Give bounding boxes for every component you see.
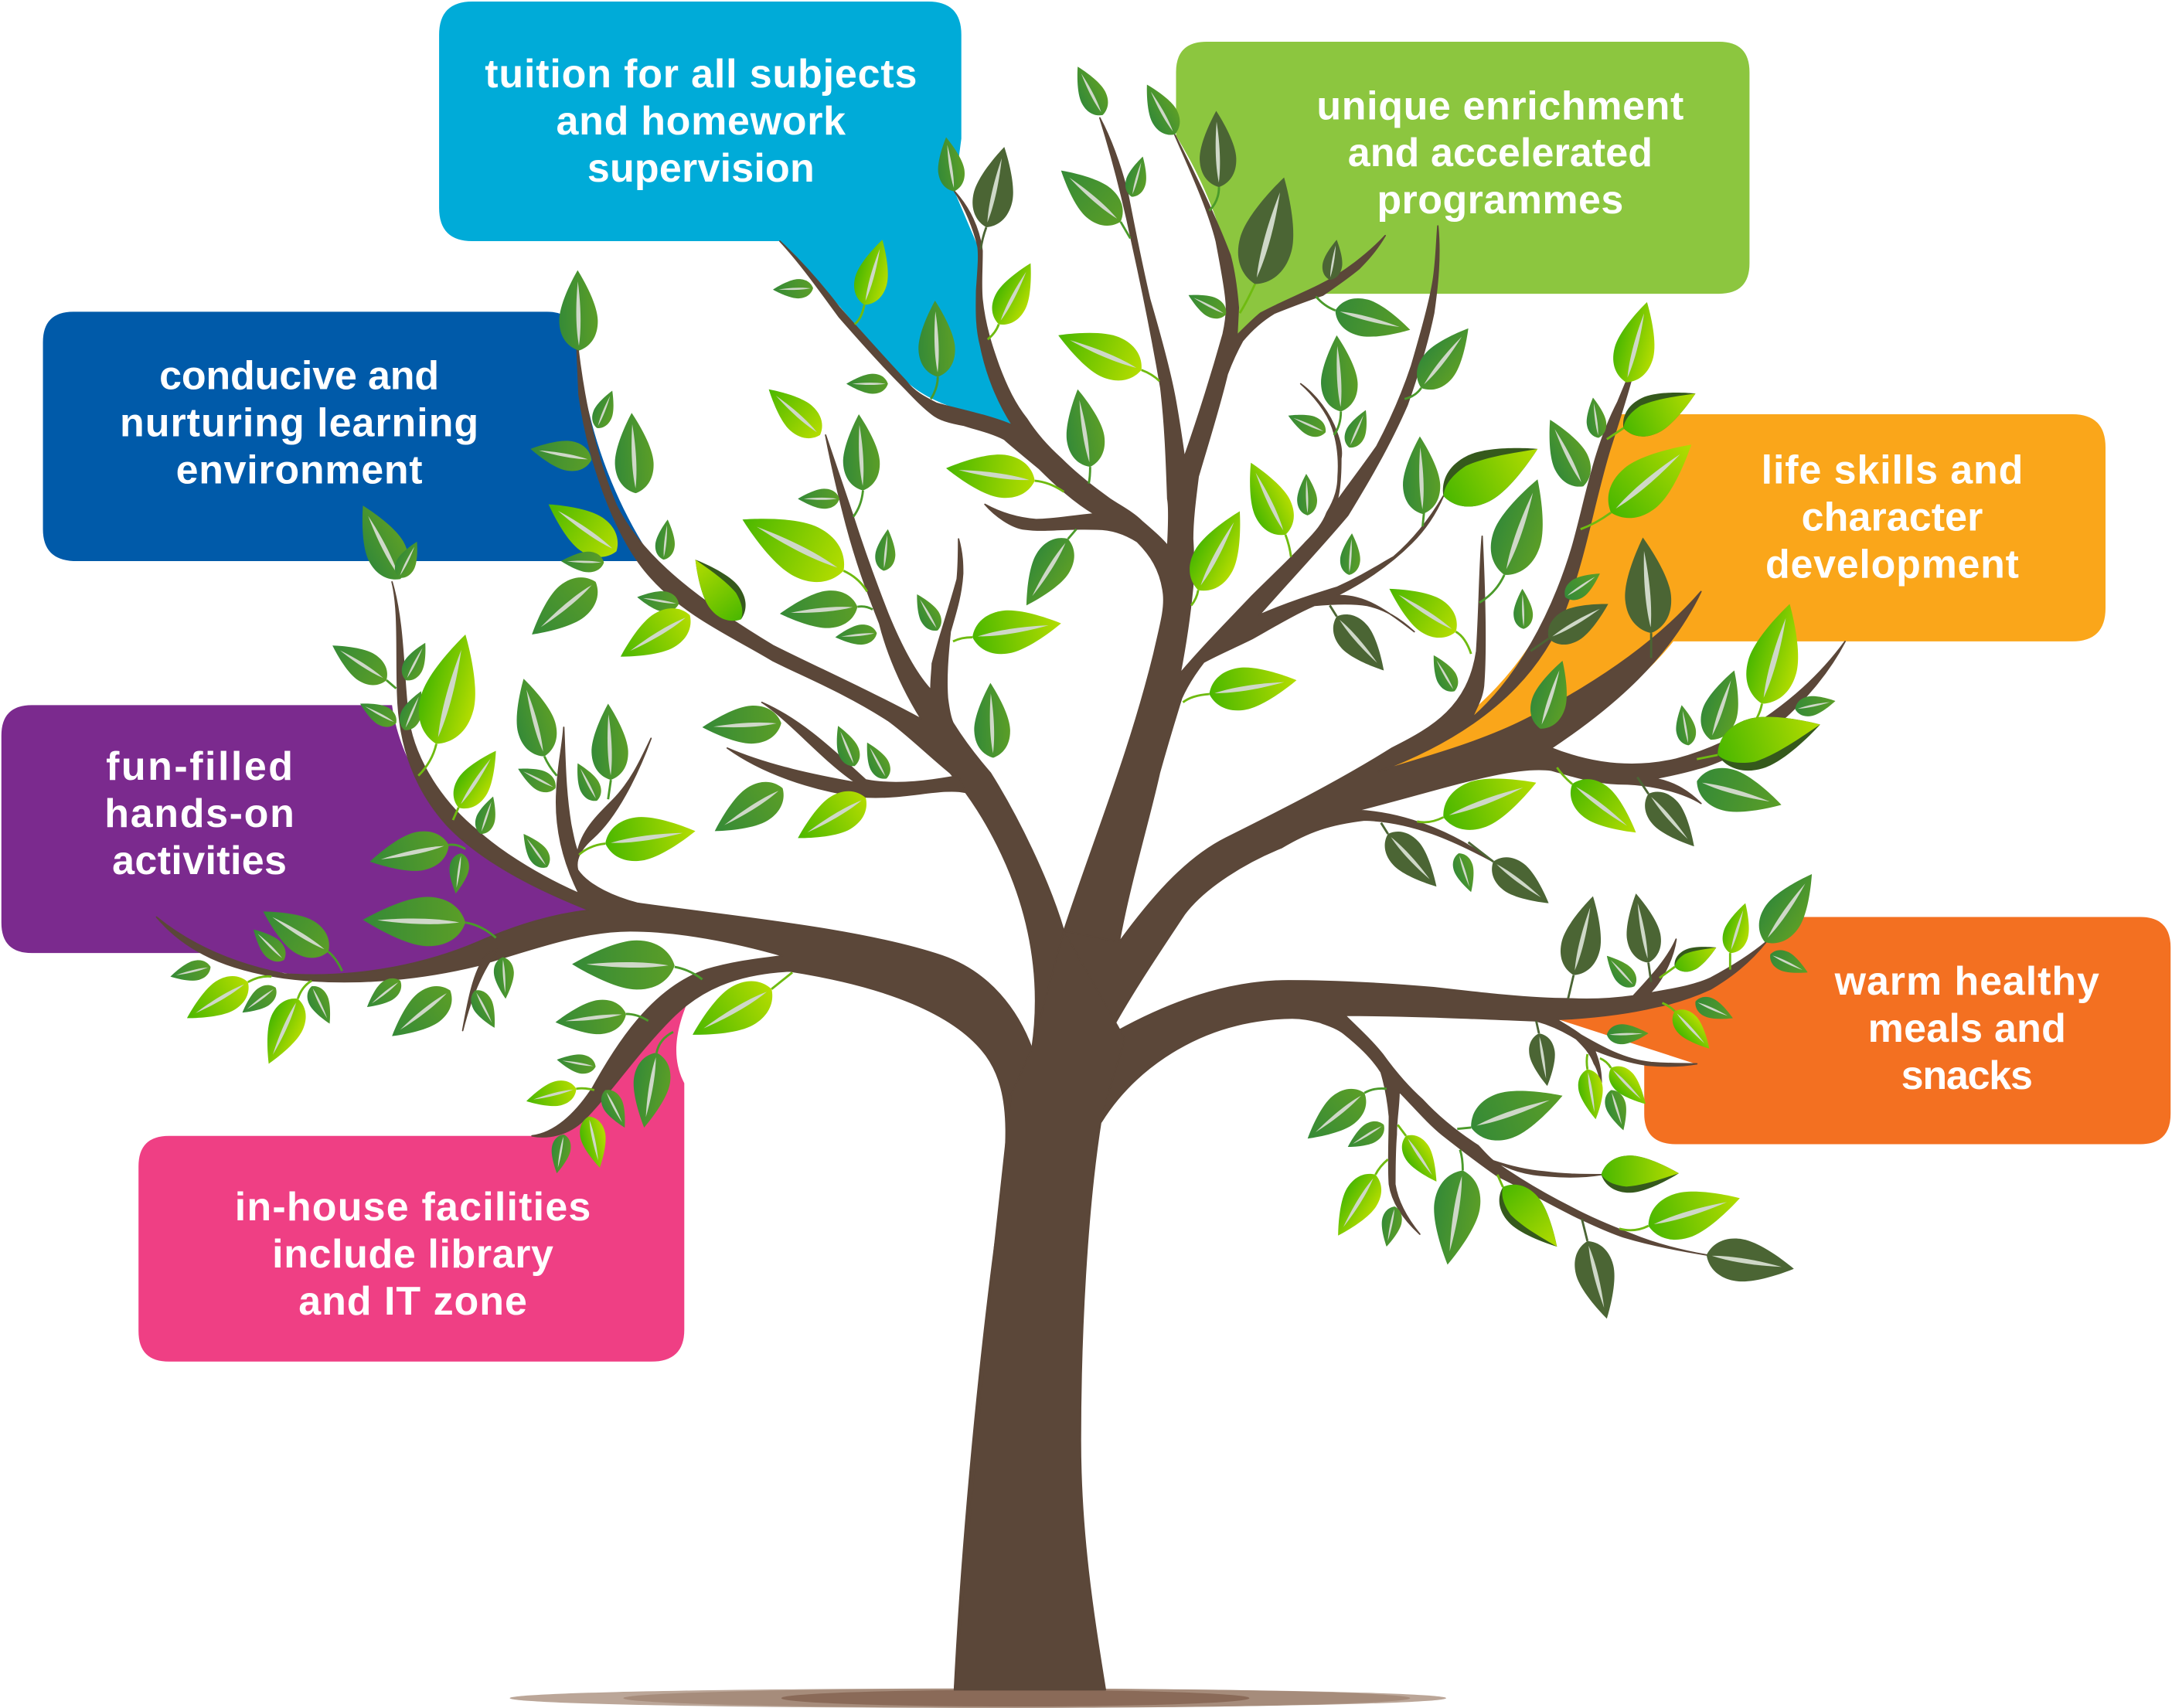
text: enrichment: unique enrichment (1316, 83, 1683, 128)
text: learning environment: conducive and (159, 354, 439, 399)
text: activities: hands-on (104, 791, 294, 836)
panel: meals (1554, 917, 2170, 1144)
text: meals (1834, 959, 2099, 1098)
ground shadow (509, 1689, 1446, 1708)
text: meals: meals and (1868, 1006, 2066, 1051)
leaves: lower left cluster (168, 940, 782, 1175)
leaves: centre right cluster (1180, 317, 1561, 715)
text: facilities: include library (272, 1232, 553, 1277)
text: facilities (235, 1185, 591, 1324)
text: life skills: life skills and (1762, 448, 2023, 493)
text: activities: activities (112, 839, 287, 883)
text: meals: snacks (1901, 1053, 2033, 1098)
text: enrichment: and accelerated (1348, 131, 1653, 175)
panel: tuition (439, 2, 1013, 425)
text: tuition: tuition for all subjects (485, 52, 917, 97)
text: enrichment: programmes (1377, 178, 1623, 223)
leaf stems (248, 187, 1762, 1241)
text: life skills: character (1802, 495, 1983, 540)
text: learning environment (120, 354, 478, 493)
text: tuition (485, 52, 917, 191)
text: activities: fun-filled (106, 744, 293, 789)
text: tuition: and homework (557, 99, 846, 144)
leaves: left cluster (246, 497, 699, 968)
text: life skills: development (1765, 542, 2019, 587)
text: facilities: and IT zone (298, 1279, 527, 1324)
text: life skills (1762, 448, 2023, 587)
leaves: upper left cluster (519, 270, 755, 673)
panel: activities (2, 705, 589, 977)
leaves: centre left cluster (701, 315, 1149, 854)
panel: facilities (138, 1000, 689, 1362)
text: meals: warm healthy (1834, 959, 2099, 1004)
leaves: upper right cluster (1375, 297, 1837, 917)
text: activities (104, 744, 294, 883)
panel: learning environment (43, 311, 654, 561)
tree trunk and branches (157, 118, 1845, 1690)
text: tuition: supervision (587, 146, 815, 191)
text: enrichment (1316, 83, 1683, 223)
panel: life skills (1378, 414, 2106, 771)
leaves: lower right cluster (1297, 863, 1828, 1323)
text: learning environment: nurturing learning (120, 401, 478, 446)
text: learning environment: environment (176, 448, 423, 493)
text: facilities: in-house facilities (235, 1185, 591, 1230)
panel: enrichment (1176, 42, 1749, 335)
leaves: top cluster (773, 60, 1415, 393)
